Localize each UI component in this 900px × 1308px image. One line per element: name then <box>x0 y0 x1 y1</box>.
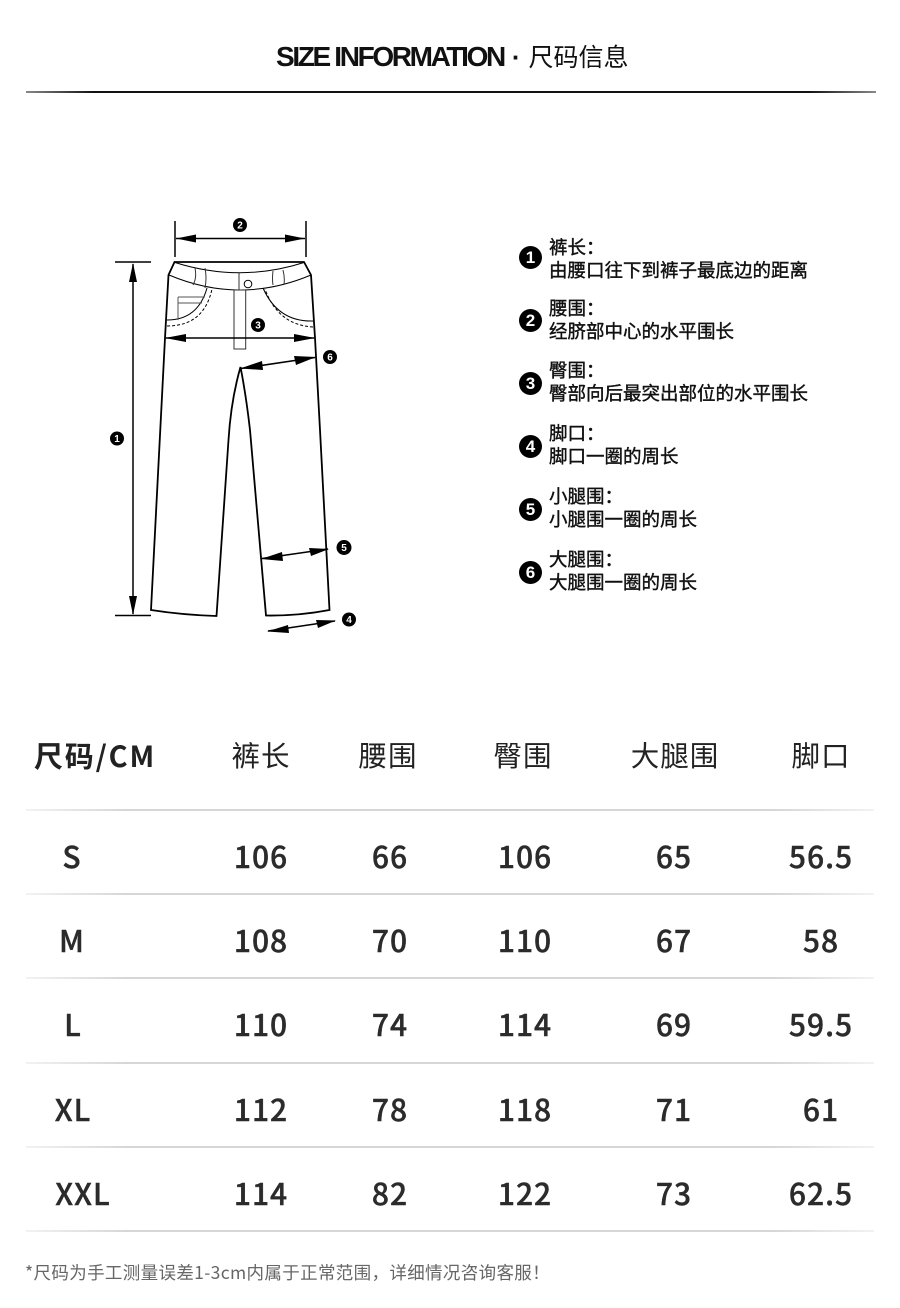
table header: 脚口 <box>791 734 850 775</box>
row M: 58 <box>803 917 839 961</box>
number markers <box>110 218 356 626</box>
row XL: 112 <box>234 1086 288 1130</box>
row XXL: 62.5 <box>789 1170 853 1214</box>
row M: 108 <box>234 917 288 961</box>
legend item 1: 裤长： <box>549 234 605 260</box>
row XL: 78 <box>372 1086 408 1130</box>
arrow 5: calf <box>261 548 329 561</box>
size table <box>26 734 874 1232</box>
row M <box>59 917 839 961</box>
row L: L <box>64 1001 82 1045</box>
row XXL: 82 <box>372 1170 408 1214</box>
row M: 70 <box>372 917 408 961</box>
table header: 尺码/CM <box>34 734 156 776</box>
footnote: *尺码为手工测量误差1-3cm内属于正常范围，详细情况咨询客服！ <box>25 1260 550 1285</box>
row M: M <box>59 917 85 961</box>
table header: 大腿围 <box>631 734 719 775</box>
row S: 56.5 <box>789 833 853 877</box>
legend item 2: 经脐部中心的水平围长 <box>549 318 734 344</box>
row XXL: 114 <box>234 1170 288 1214</box>
number markers: 2 <box>237 220 243 232</box>
legend item 6: 6 <box>526 562 535 582</box>
row S: S <box>62 833 82 877</box>
row XXL: XXL <box>55 1170 111 1214</box>
row XL <box>54 1086 839 1130</box>
row L: 59.5 <box>789 1001 853 1045</box>
legend item 6: 大腿围： <box>549 546 623 572</box>
legend item 2: 2 <box>526 310 535 330</box>
table header: 腰围 <box>358 734 418 775</box>
pants outline <box>151 262 330 616</box>
row L <box>64 1001 853 1045</box>
legend item 4 <box>519 420 679 469</box>
row S: 65 <box>656 833 692 877</box>
arrow 6: thigh <box>240 356 316 370</box>
legend item 6 <box>519 546 697 595</box>
number markers: 4 <box>346 615 352 626</box>
legend item 5: 小腿围： <box>549 483 623 509</box>
row XL: 118 <box>498 1086 552 1130</box>
legend item 2 <box>519 295 734 344</box>
number markers: 3 <box>255 320 261 332</box>
number markers: 1 <box>114 434 120 445</box>
legend item 5: 5 <box>526 500 535 518</box>
row M: 110 <box>498 917 552 961</box>
number markers: 5 <box>341 543 347 554</box>
table header: 裤长 <box>231 734 290 775</box>
row XL: 71 <box>656 1086 692 1130</box>
row XL: 61 <box>803 1086 839 1130</box>
arrow 3: hip <box>165 334 315 342</box>
legend item 5 <box>519 483 697 532</box>
legend item 1 <box>519 234 808 283</box>
row L: 110 <box>234 1001 288 1045</box>
row XL: XL <box>55 1086 91 1130</box>
row S: 106 <box>498 833 552 877</box>
row S <box>62 833 853 877</box>
legend item 5: 小腿围一圈的周长 <box>549 506 697 532</box>
title: SIZE INFORMATION · 尺码信息 <box>276 38 629 74</box>
row S: 66 <box>372 833 408 877</box>
legend item 3: 臀围： <box>549 357 605 383</box>
row M: 67 <box>656 917 692 961</box>
legend item 1: 由腰口往下到裤子最底边的距离 <box>549 257 808 283</box>
legend item 3: 臀部向后最突出部位的水平围长 <box>549 380 808 406</box>
number markers: 6 <box>327 352 333 364</box>
row L: 114 <box>498 1001 552 1045</box>
arrow 2: waist <box>175 221 306 257</box>
arrow 4: hem <box>267 620 336 633</box>
legend item 4: 4 <box>526 436 535 456</box>
row S: 106 <box>234 833 288 877</box>
legend item 6: 大腿围一圈的周长 <box>549 569 697 595</box>
legend item 2: 腰围： <box>549 295 605 321</box>
legend item 3: 3 <box>526 374 535 392</box>
pants measurement diagram <box>110 218 356 633</box>
table header <box>34 734 850 776</box>
row XXL: 122 <box>498 1170 552 1214</box>
arrow 1: length <box>115 262 151 616</box>
row L: 69 <box>656 1001 692 1045</box>
legend item 3 <box>519 357 808 406</box>
row XXL <box>55 1170 853 1214</box>
table header: 臀围 <box>493 734 552 775</box>
legend item 4: 脚口一圈的周长 <box>549 443 679 469</box>
legend item 4: 脚口： <box>549 420 605 446</box>
row L: 74 <box>372 1001 408 1045</box>
row XXL: 73 <box>656 1170 692 1214</box>
legend item 1: 1 <box>526 248 535 266</box>
